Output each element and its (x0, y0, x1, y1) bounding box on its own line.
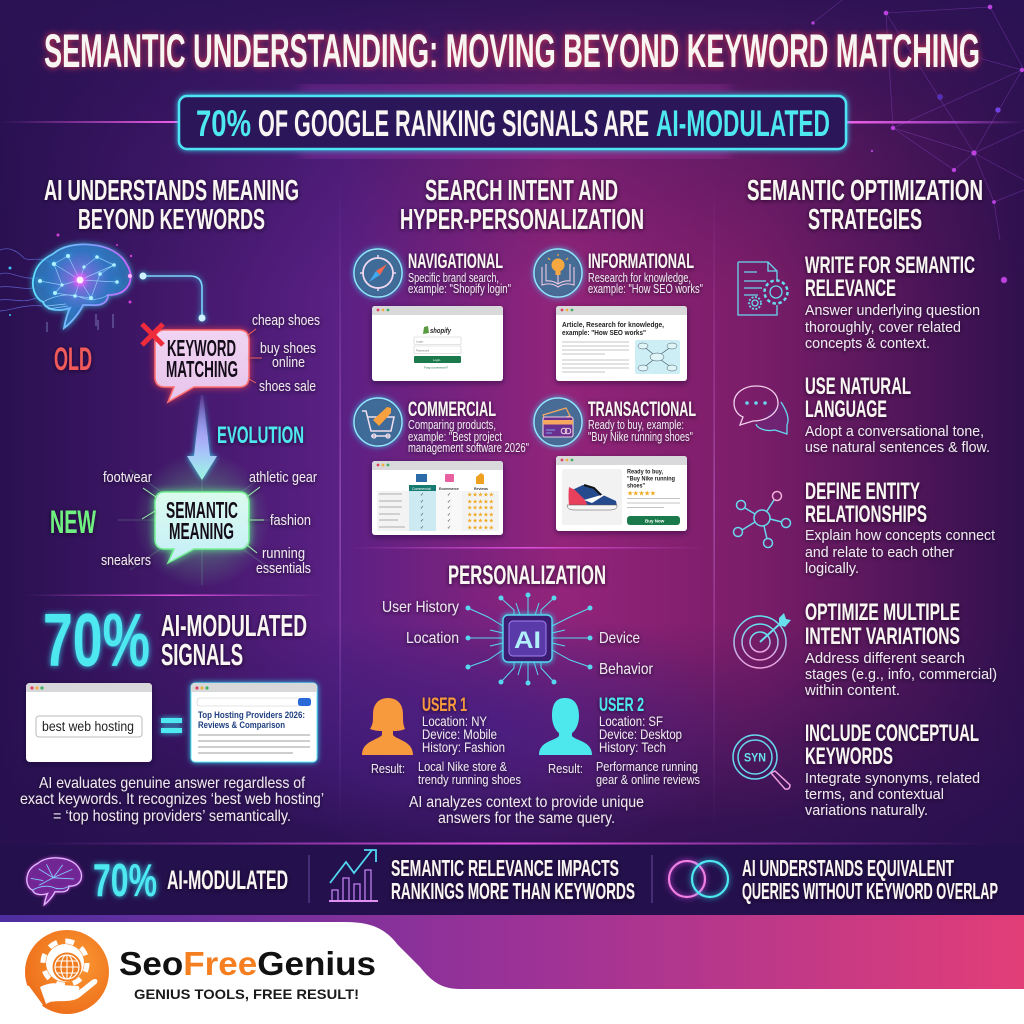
browser: shopify login (372, 306, 503, 381)
text: commercial (408, 398, 529, 455)
icon: rising chart (329, 850, 378, 901)
text: user 2: Performance running (596, 760, 698, 774)
icon: speech bubbles (734, 386, 788, 434)
keyword labels (248, 313, 320, 395)
callout: keyword matching bubble: KEYWORD (167, 335, 236, 361)
browser: product page: "Buy Nike running (627, 476, 675, 482)
text: personalization summary: answers for the same query. (438, 810, 615, 827)
semantic labels: fashion (270, 513, 311, 529)
heading: left column (44, 175, 299, 236)
text: user 2 (548, 695, 700, 787)
bottom stat strip (0, 842, 1024, 915)
icon: synonym magnifier: SYN (744, 750, 766, 764)
text: semantic relevance: SEMANTIC RELEVANCE IMPACTS (391, 855, 619, 881)
text: define entity relationships: logically. (805, 560, 859, 577)
text: use natural language: USE NATURAL (805, 373, 911, 400)
text: user 2: Location: SF (599, 714, 663, 729)
semantic labels: running (262, 546, 305, 562)
text: explanation: = ‘top hosting providers’ semantically. (53, 808, 291, 825)
text: write for semantic relevance: concepts & context. (805, 335, 930, 352)
icon: cart (354, 398, 402, 446)
callout: keyword matching bubble: MATCHING (166, 356, 238, 382)
browser: comparison table: Commercial (412, 487, 431, 491)
text: semantic relevance: RANKINGS MORE THAN KEYWORDS (391, 878, 635, 904)
icon: book and bulb (534, 249, 582, 297)
icon: user 1 (362, 698, 413, 755)
factor labels: Location (406, 630, 459, 647)
text: optimize multiple intent variations (804, 599, 997, 699)
text: informational (588, 250, 703, 296)
heading: personalization: PERSONALIZATION (448, 560, 606, 590)
text: commercial: example: "Best project (408, 430, 502, 444)
browser: comparison table: ✓ (420, 518, 424, 524)
text: user 1: Device: Mobile (422, 727, 497, 742)
stat banner: 70% (196, 103, 251, 144)
heading: middle column (400, 175, 644, 236)
text: navigational (408, 250, 511, 296)
text: navigational: Specific brand search, (408, 271, 499, 285)
text: commercial: management software 2026" (408, 441, 529, 455)
callout: semantic meaning bubble (118, 452, 290, 588)
heading: AI-modulated signals (161, 608, 307, 672)
text: user 1: Local Nike store & (418, 760, 508, 774)
text: informational: INFORMATIONAL (588, 250, 694, 273)
text: navigational: example: "Shopify login" (408, 282, 511, 296)
browser: comparison table: ✓ (420, 525, 424, 531)
text: transactional (588, 398, 696, 444)
text: user 1 (371, 695, 521, 787)
factor labels: Device (599, 630, 640, 647)
text: optimize multiple intent variations: Address different search (805, 650, 965, 667)
arrow: evolution (187, 395, 217, 480)
browser: shopify login: Login (433, 358, 441, 362)
label: evolution: EVOLUTION (217, 422, 304, 449)
browser: product page: Ready to buy, (627, 468, 663, 476)
browser: product page: ★★★★★ (627, 490, 656, 498)
stat banner (0, 85, 1024, 158)
semantic labels: footwear (103, 470, 152, 486)
text: user 1: Location: NY (422, 714, 487, 729)
browser: comparison table: ✓ (420, 505, 424, 511)
text: user 1: Result: (371, 762, 405, 776)
heading: middle column: HYPER-PERSONALIZATION (400, 204, 644, 236)
text: explanation: exact keywords. It recognizes ‘best web hosting’ (20, 791, 324, 808)
browser: product page: Buy Now (645, 518, 665, 524)
browser: product page: shoes" (627, 482, 645, 490)
factor labels: User History (382, 599, 459, 616)
text: include conceptual keywords: KEYWORDS (805, 743, 893, 770)
text: define entity relationships: RELATIONSHIPS (805, 501, 927, 528)
browser: article: example: "How SEO works" (562, 330, 646, 337)
text: informational: Research for knowledge, (588, 271, 691, 285)
keyword labels: online (272, 355, 305, 371)
callout: semantic meaning bubble: MEANING (169, 518, 234, 544)
text: user 2: Device: Desktop (599, 727, 682, 742)
semantic labels: athletic gear (249, 470, 317, 486)
text: explanation (20, 775, 324, 825)
semantic labels: essentials (256, 561, 311, 577)
text: include conceptual keywords: Integrate synonyms, related (805, 770, 980, 787)
label: old: OLD (54, 341, 92, 377)
browser: comparison table: ★★★★★ (467, 524, 494, 532)
icon: synonym magnifier (733, 735, 790, 789)
label: AI-modulated: AI-MODULATED (167, 865, 288, 895)
browser: comparison table: ✓ (420, 499, 424, 505)
column dividers (340, 180, 715, 830)
text: write for semantic relevance: Answer underlying question (805, 302, 980, 319)
text: user 1: USER 1 (422, 695, 467, 716)
heading: left column: AI UNDERSTANDS MEANING (44, 175, 299, 207)
text: personalization summary (409, 794, 644, 827)
text: explanation: AI evaluates genuine answer regardless of (39, 775, 305, 792)
image: running shoe (567, 485, 617, 510)
icon: gear globe hand (24, 930, 109, 1014)
browser: comparison table: Ecommerce (439, 487, 459, 491)
icon: glowing brain (0, 234, 132, 332)
text: commercial: Comparing products, (408, 418, 496, 432)
text: use natural language: use natural sentences & flow. (805, 439, 990, 456)
panel: search intent (354, 175, 703, 535)
logo (24, 930, 376, 1014)
panel: semantic optimization strategies (733, 175, 997, 819)
label: new: NEW (50, 504, 96, 540)
text: define entity relationships: Explain how concepts connect (805, 527, 996, 544)
brand name: SeoFreeGenius (119, 945, 376, 982)
browser: comparison table: ★★★★★ (467, 512, 494, 518)
tagline: GENIUS TOOLS, FREE RESULT! (134, 986, 359, 1002)
factor labels: Behavior (599, 661, 654, 678)
text: include conceptual keywords (805, 720, 980, 819)
icon: target (734, 613, 791, 668)
browser: comparison table: ✓ (420, 492, 424, 498)
icon: AI chip (466, 592, 592, 686)
browser: shopify login: Forgot password? (424, 366, 448, 370)
keyword labels: cheap shoes (252, 313, 320, 329)
text: write for semantic relevance (805, 252, 980, 352)
footer band (0, 915, 1024, 1024)
icon: compass (354, 249, 402, 297)
text: personalization summary: AI analyzes context to provide unique (409, 794, 644, 811)
icon: overlapping circles (669, 861, 728, 897)
keyword labels: buy shoes (260, 341, 316, 357)
text: optimize multiple intent variations: stages (e.g., info, commercial) (805, 666, 997, 683)
text: semantic relevance (391, 855, 635, 904)
text: use natural language: LANGUAGE (805, 396, 887, 423)
keyword labels: shoes sale (259, 379, 316, 395)
semantic labels (101, 470, 317, 577)
stat: 70%: 70% (93, 854, 157, 906)
callout: semantic meaning bubble: SEMANTIC (166, 497, 238, 523)
browser: comparison table: ✓ (447, 505, 451, 511)
browser: comparison table: ★★★★★ (467, 518, 494, 524)
text: write for semantic relevance: RELEVANCE (805, 275, 896, 302)
text: user 2: Result: (548, 762, 583, 776)
browser: article: Article, Research for knowledge, (562, 322, 664, 329)
browser: comparison table: ★★★★★ (467, 492, 494, 498)
stat banner: OF GOOGLE RANKING SIGNALS ARE (258, 103, 649, 144)
icon: entity network (734, 492, 790, 548)
text: use natural language: Adopt a conversational tone, (805, 423, 984, 440)
browser: shopify login: Password (416, 348, 430, 352)
equals sign (161, 718, 182, 733)
text: transactional: TRANSACTIONAL (588, 398, 696, 421)
browser: comparison table: ✓ (420, 512, 424, 518)
browser: comparison table: ✓ (447, 512, 451, 518)
browser: shopify login: shopify (430, 328, 452, 335)
text: include conceptual keywords: variations naturally. (805, 802, 928, 819)
text: transactional: Ready to buy, example: (588, 418, 684, 432)
browser: comparison table: ★★★★★ (467, 498, 494, 506)
browser: product page (556, 456, 687, 531)
browser: search result: Reviews & Comparison (198, 720, 285, 731)
panel: AI understands meaning (0, 175, 320, 588)
icon: document with gears (738, 262, 788, 315)
browser: comparison table: ✓ (447, 492, 451, 498)
icon: credit cards (534, 398, 582, 446)
stat: 70%: 70% (43, 598, 150, 682)
browser: comparison table: Reviews (474, 487, 488, 491)
browser: search result: Top Hosting Providers 2026: (198, 710, 305, 721)
heading: right column (747, 175, 983, 236)
panel: 70% AI-modulated signals (20, 598, 324, 825)
browser: comparison table: ✓ (447, 525, 451, 531)
browser: comparison table: ✓ (447, 499, 451, 505)
stat banner: AI-MODULATED (656, 103, 830, 144)
factor labels (382, 599, 654, 678)
text: commercial: COMMERCIAL (408, 398, 496, 421)
text: transactional: "Buy Nike running shoes" (588, 430, 693, 444)
text: user 2: USER 2 (599, 695, 644, 716)
heading: AI-modulated signals: SIGNALS (161, 637, 243, 672)
heading: middle column: SEARCH INTENT AND (425, 175, 618, 207)
icon: red x (142, 324, 163, 345)
callout: keyword matching bubble (155, 330, 249, 402)
icon: small brain (27, 858, 81, 905)
text: user 2: gear & online reviews (596, 773, 700, 787)
semantic labels: sneakers (101, 553, 151, 569)
text: write for semantic relevance: thoroughly, cover related (805, 319, 961, 336)
text: define entity relationships: DEFINE ENTITY (805, 478, 920, 505)
text: include conceptual keywords: terms, and contextual (805, 786, 944, 803)
text: user 2: History: Tech (599, 740, 666, 755)
icon: user 2 (539, 698, 592, 755)
text: define entity relationships (805, 478, 996, 577)
icon: AI chip: AI (514, 627, 541, 654)
browser: comparison table (372, 461, 503, 535)
browser: comparison table: ✓ (447, 518, 451, 524)
browser: search query (26, 683, 152, 762)
browser: comparison table: ★★★★★ (467, 504, 494, 512)
network decoration (812, 0, 1024, 283)
text: informational: example: "How SEO works" (588, 282, 703, 296)
text: optimize multiple intent variations: within content. (804, 682, 900, 699)
heading: AI-modulated signals: AI-MODULATED (161, 608, 307, 643)
text: user 1: History: Fashion (422, 740, 505, 755)
browser: search query: best web hosting (42, 719, 134, 734)
text: navigational: NAVIGATIONAL (408, 250, 503, 273)
text: define entity relationships: and relate to each other (805, 544, 954, 561)
text: user 1: trendy running shoes (418, 773, 521, 787)
text: equivalent queries (742, 855, 998, 904)
browser: search result (191, 683, 317, 762)
heading: left column: BEYOND KEYWORDS (78, 204, 265, 236)
text: use natural language (805, 373, 990, 456)
browser: shopify login: Login (416, 340, 424, 344)
browser: article (556, 306, 687, 381)
panel: personalization (362, 560, 700, 827)
heading: right column: STRATEGIES (808, 204, 922, 236)
connector line (140, 272, 206, 322)
